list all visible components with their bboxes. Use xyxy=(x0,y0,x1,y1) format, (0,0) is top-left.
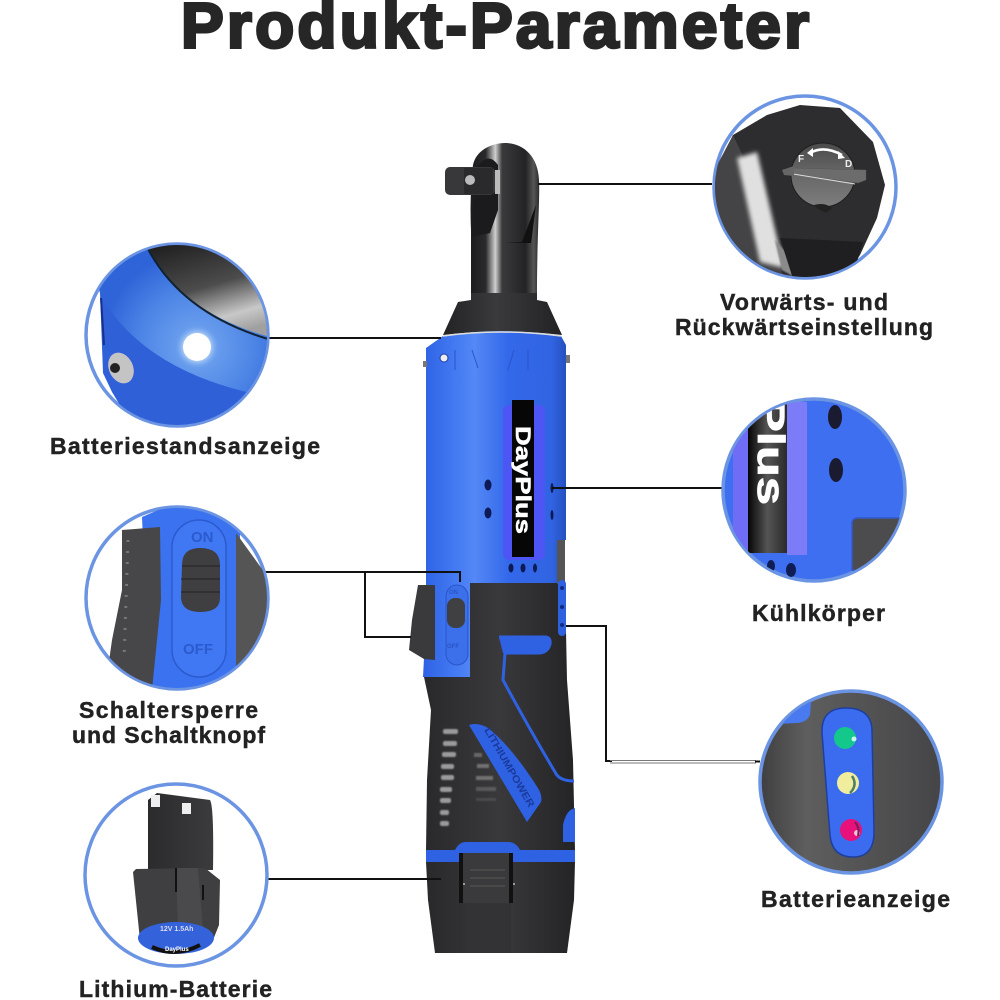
lithium power patch xyxy=(469,724,541,822)
panel: lithium battery xyxy=(85,784,267,966)
blue trim xyxy=(499,637,575,842)
nose cone xyxy=(443,293,562,335)
grip ribs xyxy=(440,729,496,826)
switch: ON xyxy=(449,590,458,596)
callout lines xyxy=(265,184,760,879)
label: Schaltersperre und Schaltknopf: und Schaltknopf xyxy=(72,722,265,748)
upper blue body xyxy=(423,331,570,677)
switch xyxy=(446,585,468,665)
panel: heat sink: Plus xyxy=(749,398,791,505)
label: Batterieanzeige: Batterieanzeige xyxy=(761,886,950,912)
brand label xyxy=(503,400,545,560)
label: Vorwärts- und Rückwärtseinstellung: Vorwärts- und xyxy=(720,289,888,315)
panel: switch lock and button xyxy=(86,505,270,700)
label: Vorwärts- und Rückwärtseinstellung xyxy=(675,289,933,340)
label: Batteriestandsanzeige: Batteriestandsanzeige xyxy=(50,433,320,459)
panel: lithium battery: 12V 1.5Ah xyxy=(160,926,193,933)
label: Schaltersperre und Schaltknopf xyxy=(72,697,265,748)
panel: forward reverse setting: F xyxy=(798,154,804,165)
battery pack xyxy=(426,842,575,953)
switch: OFF xyxy=(447,644,459,650)
panel: heat sink xyxy=(723,398,905,581)
vent holes xyxy=(484,480,554,572)
panel: battery indicator LEDs xyxy=(760,690,942,873)
panel: battery level indicator light xyxy=(86,240,270,430)
ratchet tool xyxy=(409,143,575,953)
label: Kühlkörper: Kühlkörper xyxy=(752,600,885,626)
panel: lithium battery: DayPlus xyxy=(165,947,189,953)
battery indicator pill xyxy=(558,580,566,636)
lithium power patch: LITHIUMPOWER xyxy=(481,726,536,810)
panel: forward reverse setting xyxy=(710,96,896,285)
label: Schaltersperre und Schaltknopf: Schaltersperre xyxy=(79,697,258,723)
panel: switch lock and button: OFF xyxy=(183,641,213,658)
brand label: DayPlus xyxy=(511,426,534,534)
grip xyxy=(424,583,575,850)
lever xyxy=(409,585,435,660)
ratchet head xyxy=(445,143,539,295)
panel: switch lock and button: ON xyxy=(191,529,214,546)
label: Vorwärts- und Rückwärtseinstellung: Rückwärtseinstellung xyxy=(675,314,933,340)
panel: forward reverse setting: D xyxy=(845,159,852,170)
